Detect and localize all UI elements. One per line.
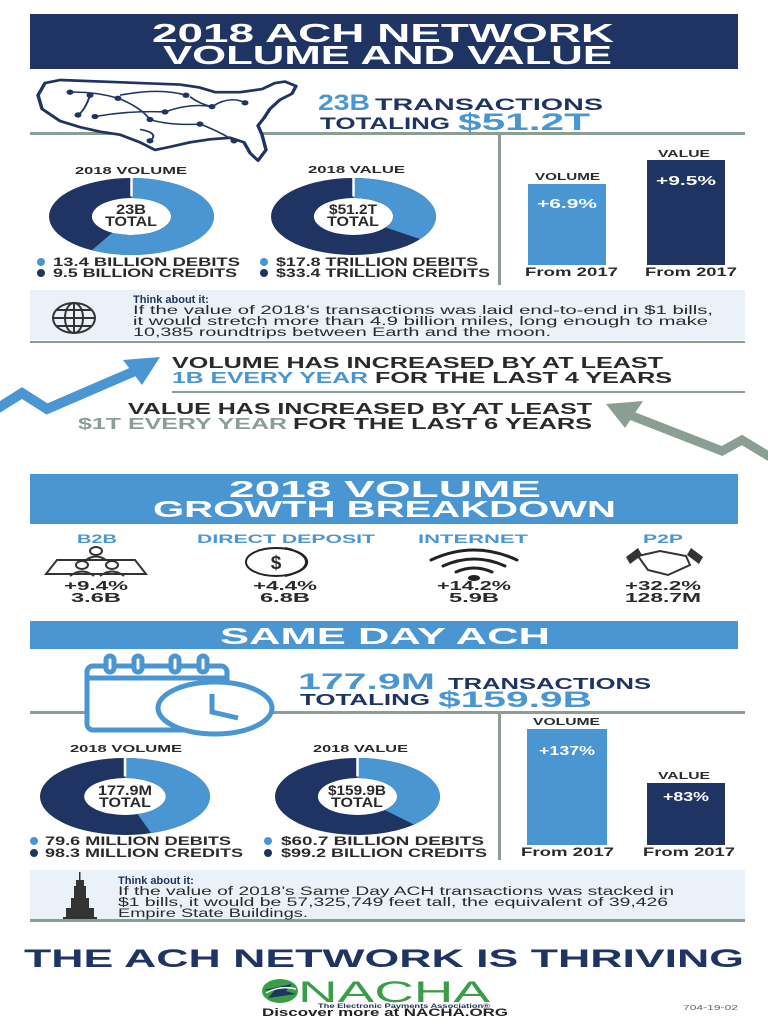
text: value increase: VALUE HAS INCREASED BY AT LEAST xyxy=(128,401,592,418)
donut chart: 2018 volume: TOTAL xyxy=(105,213,158,229)
donut chart: same day value: $159.9B xyxy=(328,782,386,798)
headline: 23B transactions: $51.2T xyxy=(458,109,591,136)
legend: volume: 9.5 BILLION CREDITS xyxy=(53,268,237,280)
legend: volume xyxy=(37,257,241,280)
callout: think about it (empire state): $1 bills, it would be 57,325,749 feet tall, the equivalent of 39,426 xyxy=(118,897,668,909)
arrow: blue growth xyxy=(0,357,160,410)
banner: volume growth breakdown: 2018 VOLUME xyxy=(229,476,541,502)
text: value increase: $1T EVERY YEAR xyxy=(78,416,288,433)
arrow: gray growth xyxy=(606,401,768,460)
text: volume increase: FOR THE LAST 4 YEARS xyxy=(375,370,673,387)
text: volume increase: 1B EVERY YEAR xyxy=(172,370,369,387)
item: direct deposit: $ xyxy=(271,553,282,574)
item: P2P: +32.2% xyxy=(625,578,702,593)
bar chart: growth from 2017: VALUE xyxy=(658,149,711,160)
bar chart: same day growth: VOLUME xyxy=(533,717,601,728)
item: internet: +14.2% xyxy=(437,578,512,593)
item: direct deposit: +4.4% xyxy=(253,578,318,593)
banner: same day ACH: SAME DAY ACH xyxy=(220,623,550,649)
item: internet: 5.9B xyxy=(449,590,499,605)
callout: think about it (empire state) xyxy=(30,870,745,922)
text: volume increase: VOLUME HAS INCREASED BY AT LEAST xyxy=(172,355,663,372)
headline: 177.9M transactions xyxy=(298,669,652,712)
callout: think about it (globe): If the value of 2018’s transactions was laid end-to-end in $1 bills, xyxy=(133,305,713,317)
banner: volume growth breakdown xyxy=(30,474,738,524)
donut chart: same day volume: TOTAL xyxy=(99,794,152,810)
donut chart: 2018 volume xyxy=(70,166,193,245)
legend: value xyxy=(260,257,490,280)
bar chart: growth from 2017: +6.9% xyxy=(537,196,598,211)
icon: calendar clock xyxy=(87,656,272,734)
donut chart: 2018 volume: 2018 VOLUME xyxy=(75,166,188,177)
donut chart: 2018 value xyxy=(292,165,415,245)
item: P2P xyxy=(625,532,703,605)
legend: same day value: $60.7 BILLION DEBITS xyxy=(281,836,485,848)
callout: think about it (empire state): If the value of 2018’s Same Day ACH transactions was stacked in xyxy=(118,886,674,898)
item: internet xyxy=(418,532,529,605)
item: B2B: B2B xyxy=(77,532,118,546)
legend: same day volume xyxy=(30,836,243,860)
banner: volume growth breakdown: GROWTH BREAKDOWN xyxy=(153,496,616,522)
item: P2P: 128.7M xyxy=(625,590,701,605)
title banner xyxy=(30,14,738,70)
donut chart: 2018 value: TOTAL xyxy=(327,213,380,229)
donut chart: same day value: 2018 VALUE xyxy=(313,744,409,755)
item: B2B: 3.6B xyxy=(71,590,121,605)
code number: 704-19-02 xyxy=(683,1005,738,1012)
headline: 23B transactions: TRANSACTIONS xyxy=(375,95,603,114)
bar chart: growth from 2017 xyxy=(525,149,737,279)
bar chart: same day growth: From 2017 xyxy=(643,847,735,859)
headline: 177.9M transactions: TRANSACTIONS xyxy=(448,676,652,693)
donut chart: 2018 volume: 23B xyxy=(116,201,146,217)
donut chart: same day volume: 2018 VOLUME xyxy=(70,744,183,755)
legend: same day volume: 98.3 MILLION CREDITS xyxy=(45,848,243,860)
callout: think about it (empire state): Think about it: xyxy=(118,875,194,887)
item: direct deposit: 6.8B xyxy=(260,590,310,605)
donut chart: same day value xyxy=(296,744,419,825)
headline: 177.9M transactions: $159.9B xyxy=(438,687,592,712)
title banner: 2018 ACH NETWORK xyxy=(152,18,614,48)
bar chart: same day growth: VALUE xyxy=(658,771,711,782)
legend: value: $17.8 TRILLION DEBITS xyxy=(276,257,479,269)
donut chart: same day volume xyxy=(62,744,188,825)
headline: 23B transactions xyxy=(318,90,603,136)
bar chart: same day growth: +83% xyxy=(663,789,710,804)
callout: think about it (empire state): Empire State Buildings. xyxy=(118,908,308,920)
bar chart: same day growth xyxy=(521,717,735,859)
title banner: VOLUME AND VALUE xyxy=(163,40,612,70)
bar chart: growth from 2017: VOLUME xyxy=(535,172,600,183)
donut chart: 2018 value: $51.2T xyxy=(329,201,377,217)
legend: same day value: $99.2 BILLION CREDITS xyxy=(281,848,488,860)
logo: NACHA xyxy=(262,976,508,1019)
icon: US network map xyxy=(38,80,296,161)
item: direct deposit xyxy=(197,532,376,605)
item: direct deposit: DIRECT DEPOSIT xyxy=(197,532,376,546)
callout: think about it (globe): 10,385 roundtrips between Earth and the moon. xyxy=(133,327,551,339)
donut chart: same day volume: 177.9M xyxy=(98,782,152,798)
banner: same day ACH xyxy=(30,621,738,649)
logo: NACHA: Discover more at NACHA.ORG xyxy=(262,1007,508,1019)
bar chart: growth from 2017: From 2017 xyxy=(525,267,618,279)
closing heading: THE ACH NETWORK IS THRIVING xyxy=(24,945,744,973)
logo: NACHA: The Electronic Payments Association® xyxy=(318,1003,491,1010)
item: B2B xyxy=(46,532,146,605)
callout: think about it (globe): Think about it: xyxy=(133,294,209,306)
bar chart: growth from 2017: From 2017 xyxy=(645,267,737,279)
headline: 23B transactions: TOTALING xyxy=(320,114,450,133)
icon: empire state building xyxy=(63,872,97,919)
text: volume increase xyxy=(172,355,673,387)
headline: 23B transactions: 23B xyxy=(318,90,370,115)
legend: same day volume: 79.6 MILLION DEBITS xyxy=(45,836,232,848)
bar chart: same day growth: From 2017 xyxy=(521,847,614,859)
text: value increase xyxy=(78,401,593,433)
legend: value: $33.4 TRILLION CREDITS xyxy=(276,268,490,280)
text: value increase: FOR THE LAST 6 YEARS xyxy=(293,416,593,433)
callout: think about it (globe) xyxy=(30,290,745,340)
item: B2B: +9.4% xyxy=(64,578,129,593)
bar chart: same day growth: +137% xyxy=(539,743,596,758)
bar chart: growth from 2017: +9.5% xyxy=(656,173,717,188)
donut chart: same day value: TOTAL xyxy=(331,794,384,810)
donut chart: 2018 value: 2018 VALUE xyxy=(308,165,406,176)
legend: volume: 13.4 BILLION DEBITS xyxy=(53,257,241,269)
callout: think about it (globe): it would stretch more than 4.9 billion miles, long enough to make xyxy=(133,316,708,328)
item: P2P: P2P xyxy=(643,532,683,546)
legend: same day value xyxy=(264,836,488,860)
item: internet: INTERNET xyxy=(418,532,529,546)
headline: 177.9M transactions: 177.9M xyxy=(298,669,435,694)
icon: globe xyxy=(53,303,95,333)
logo: NACHA: NACHA xyxy=(298,976,490,1009)
headline: 177.9M transactions: TOTALING xyxy=(300,692,430,709)
